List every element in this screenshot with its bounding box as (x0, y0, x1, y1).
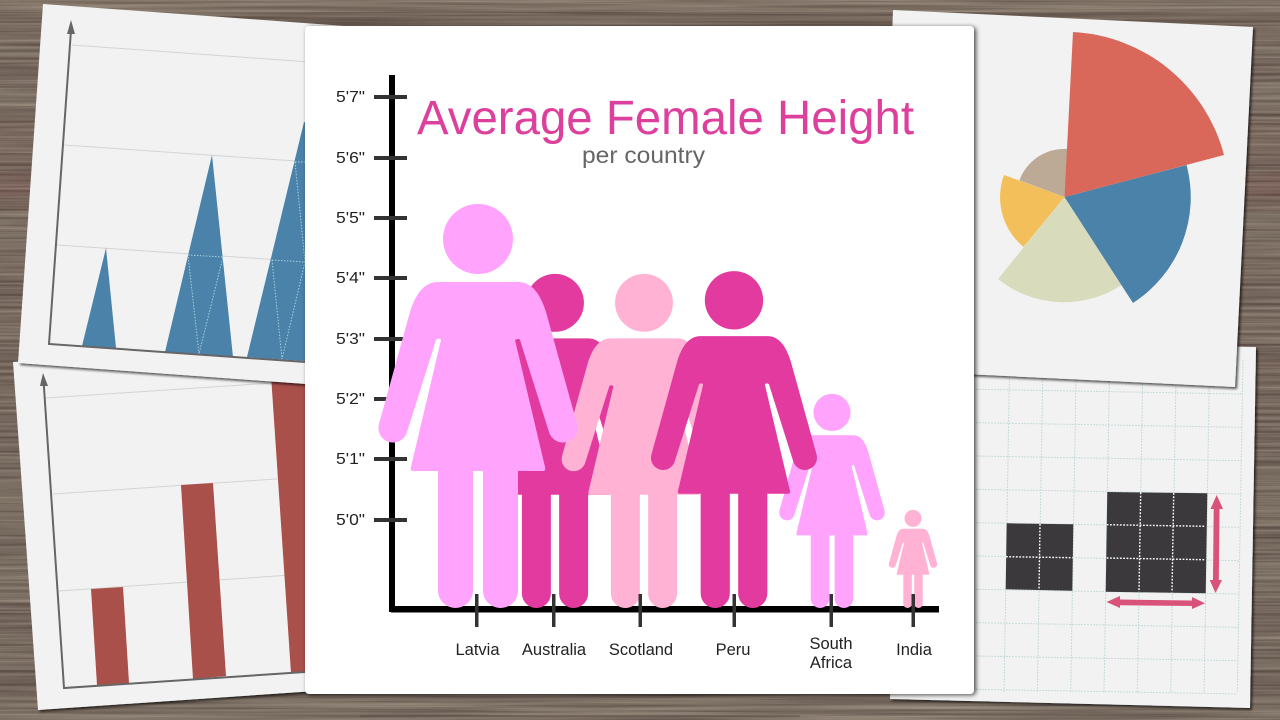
x axis labels (455, 635, 933, 672)
paper: triangle chart (18, 4, 345, 385)
bar 2 (181, 483, 226, 679)
wedge: pale green (998, 197, 1122, 302)
y axis labels: 5'7" (336, 89, 365, 106)
gridlines (46, 383, 305, 591)
graph paper grid (976, 360, 1243, 694)
y axis labels: 5'2" (336, 391, 365, 408)
axes (49, 30, 320, 363)
figure: Australia (473, 274, 637, 608)
bar 3 (271, 375, 320, 673)
y axis labels: 5'6" (336, 150, 365, 167)
x axis (391, 606, 939, 612)
wedge: red (1064, 32, 1224, 197)
figure: Peru (651, 271, 817, 608)
gridlines (57, 45, 310, 262)
figure: Latvia (378, 204, 578, 608)
wedge: blue (1064, 165, 1191, 303)
figure: South Africa (779, 394, 885, 608)
paper: polar area chart (880, 10, 1253, 387)
paper: area squares chart (890, 340, 1256, 708)
arrow: horizontal (1106, 596, 1205, 609)
x axis labels: Africa (810, 654, 853, 672)
y axis (336, 75, 407, 612)
subtitle: per country (582, 142, 706, 168)
x axis labels: South (809, 635, 853, 653)
main panel: average female height (305, 26, 974, 694)
large square (1106, 492, 1207, 593)
x axis labels: Scotland (609, 641, 673, 659)
wedge: yellow (1000, 175, 1064, 247)
title: Average Female Height (417, 92, 914, 145)
y axis labels: 5'1" (336, 451, 365, 468)
y axis labels (336, 89, 365, 529)
triangle 2 (165, 155, 233, 357)
y axis labels: 5'3" (336, 331, 365, 348)
figure: Scotland (562, 274, 726, 608)
bar 1 (91, 587, 129, 685)
figure: India (889, 510, 937, 608)
triangle 1 (82, 248, 116, 348)
x axis labels: Peru (716, 641, 750, 659)
paper: bar chart (13, 340, 360, 710)
wedge: tan (1019, 149, 1068, 197)
dotted construction lines (188, 162, 305, 359)
axis arrowhead (40, 373, 48, 386)
x axis labels: India (896, 641, 933, 659)
axis arrowhead (67, 20, 75, 34)
x axis labels: Australia (522, 641, 587, 659)
small square (1006, 523, 1073, 591)
y axis labels: 5'4" (336, 270, 365, 287)
x axis ticks (475, 594, 915, 627)
triangle 3 (247, 122, 320, 362)
arrow: vertical (1210, 495, 1223, 593)
x axis labels: Latvia (455, 641, 500, 659)
y axis labels: 5'0" (336, 512, 365, 529)
y axis labels: 5'5" (336, 210, 365, 227)
axes (44, 380, 320, 688)
y axis ticks (374, 95, 407, 522)
